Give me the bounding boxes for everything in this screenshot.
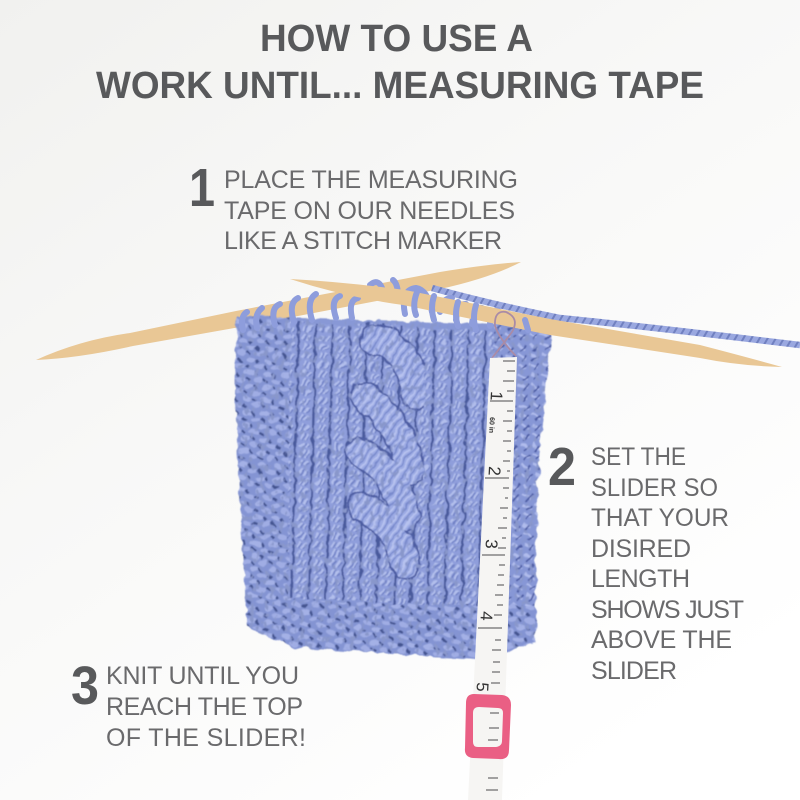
tape numbers: 1 (487, 391, 506, 401)
title: WORK UNTIL... MEASURING TAPE (96, 65, 704, 107)
tape numbers: 3 (482, 539, 501, 549)
step 2 text (548, 437, 744, 685)
step 3 text: KNIT UNTIL YOU (106, 662, 299, 690)
step 2 text: SLIDER SO (591, 474, 718, 502)
right rib columns (422, 328, 500, 608)
step 3 text: 3 (71, 656, 99, 716)
tape numbers (473, 391, 506, 692)
step 1 text (189, 158, 518, 255)
step 1 text: LIKE A STITCH MARKER (224, 227, 502, 255)
pink slider (465, 694, 511, 759)
step 1 text: TAPE ON OUR NEEDLES (224, 197, 515, 225)
title: HOW TO USE A (260, 18, 533, 60)
tape numbers: 2 (485, 466, 504, 476)
tape numbers: 5 (473, 682, 492, 692)
tape ticks (478, 361, 515, 790)
cable twist (360, 340, 416, 565)
step 2 text: ABOVE THE (591, 626, 732, 654)
step 2 text: 2 (548, 437, 576, 497)
step 2 text: LENGTH (591, 565, 690, 593)
bottom garter band (246, 598, 538, 659)
stitches on needle (242, 280, 538, 332)
left garter edge (234, 314, 292, 615)
knitted swatch (230, 310, 553, 665)
title (96, 18, 704, 107)
right edge (495, 326, 553, 626)
step 1 text: PLACE THE MEASURING (224, 166, 518, 194)
step 2 text: THAT YOUR (591, 504, 729, 532)
stitches over front needle (414, 292, 528, 330)
step 2 text: SLIDER (591, 657, 677, 685)
tape numbers: 4 (477, 611, 496, 621)
cable background (350, 322, 430, 605)
step 2 text: SET THE (591, 443, 686, 471)
tape numbers: 60 in (487, 417, 495, 433)
yarn tail (432, 288, 800, 345)
back knitting needle (36, 262, 521, 360)
step 3 text (71, 656, 306, 752)
step 2 text: DISIRED (591, 535, 691, 563)
left rib columns (288, 320, 360, 600)
step 3 text: OF THE SLIDER! (106, 724, 306, 752)
measuring tape (468, 357, 517, 800)
step 3 text: REACH THE TOP (106, 693, 303, 721)
step 1 text: 1 (189, 158, 215, 218)
wire stitch marker (492, 312, 516, 358)
step 2 text: SHOWS JUST (591, 596, 744, 624)
front knitting needle (290, 279, 782, 367)
